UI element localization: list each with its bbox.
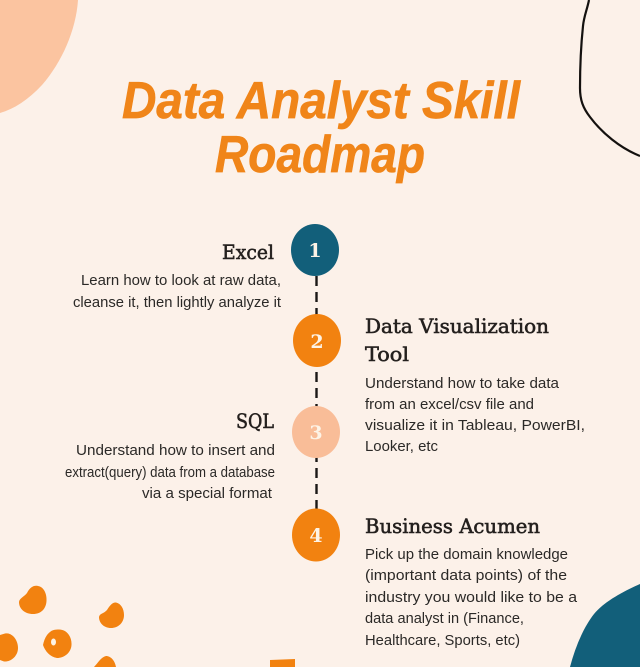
step 2 badge: 2 — [310, 331, 324, 353]
step 2 badge — [293, 314, 341, 367]
step 4 text: Business Acumen: Business Acumen — [365, 514, 540, 538]
title: Roadmap — [215, 126, 425, 184]
step 4 text: Business Acumen — [365, 514, 578, 649]
step 4 text: Business Acumen: industry you would like to be a — [365, 589, 578, 606]
step 4 text: Business Acumen: Pick up the domain knowledge — [365, 546, 568, 563]
step 3 text: SQL: extract(query) data from a database — [65, 464, 275, 481]
step 1 text: Excel: Learn how to look at raw data, — [81, 272, 281, 289]
step 3 text: SQL: SQL — [236, 409, 274, 433]
step 2 text: Data Visualization Tool: Tool — [365, 342, 409, 366]
step 1 text: Excel: cleanse it, then lightly analyze it — [73, 294, 282, 311]
step 2 text: Data Visualization Tool — [365, 314, 585, 455]
step 3 text: SQL: via a special format — [142, 485, 273, 502]
step 3 text: SQL: Understand how to insert and — [76, 442, 275, 459]
step 4 badge — [292, 508, 340, 562]
step 3 badge: 3 — [309, 422, 323, 444]
small hole in orange shape — [51, 638, 56, 646]
step 2 text: Data Visualization Tool: Understand how to take data — [365, 375, 560, 392]
title — [122, 72, 521, 184]
step 4 badge: 4 — [309, 525, 323, 547]
dashed timeline connector — [315, 276, 318, 510]
step 2 text: Data Visualization Tool: from an excel/csv file and — [365, 396, 534, 413]
step 2 text: Data Visualization Tool: Data Visualization — [365, 314, 549, 338]
step 1 text: Excel: Excel — [222, 240, 274, 264]
title: Data Analyst Skill — [122, 72, 521, 130]
step 1 badge: 1 — [308, 240, 322, 262]
step 4 text: Business Acumen: data analyst in (Finance, — [365, 610, 524, 627]
step 4 text: Business Acumen: Healthcare, Sports, etc) — [365, 632, 520, 649]
step 2 text: Data Visualization Tool: Looker, etc — [365, 438, 438, 455]
step 1 text: Excel — [73, 240, 282, 311]
step 2 text: Data Visualization Tool: visualize it in Tableau, PowerBI, — [365, 417, 585, 434]
step 4 text: Business Acumen: (important data points) of the — [365, 567, 567, 584]
decorative orange shapes bottom left — [0, 586, 295, 667]
step 1 badge — [291, 224, 339, 276]
decorative black outline top right — [580, 0, 640, 156]
decorative teal blob bottom right — [570, 584, 640, 667]
step 3 badge — [292, 406, 340, 458]
step 3 text: SQL — [65, 409, 275, 502]
decorative peach blob top left — [0, 0, 78, 113]
